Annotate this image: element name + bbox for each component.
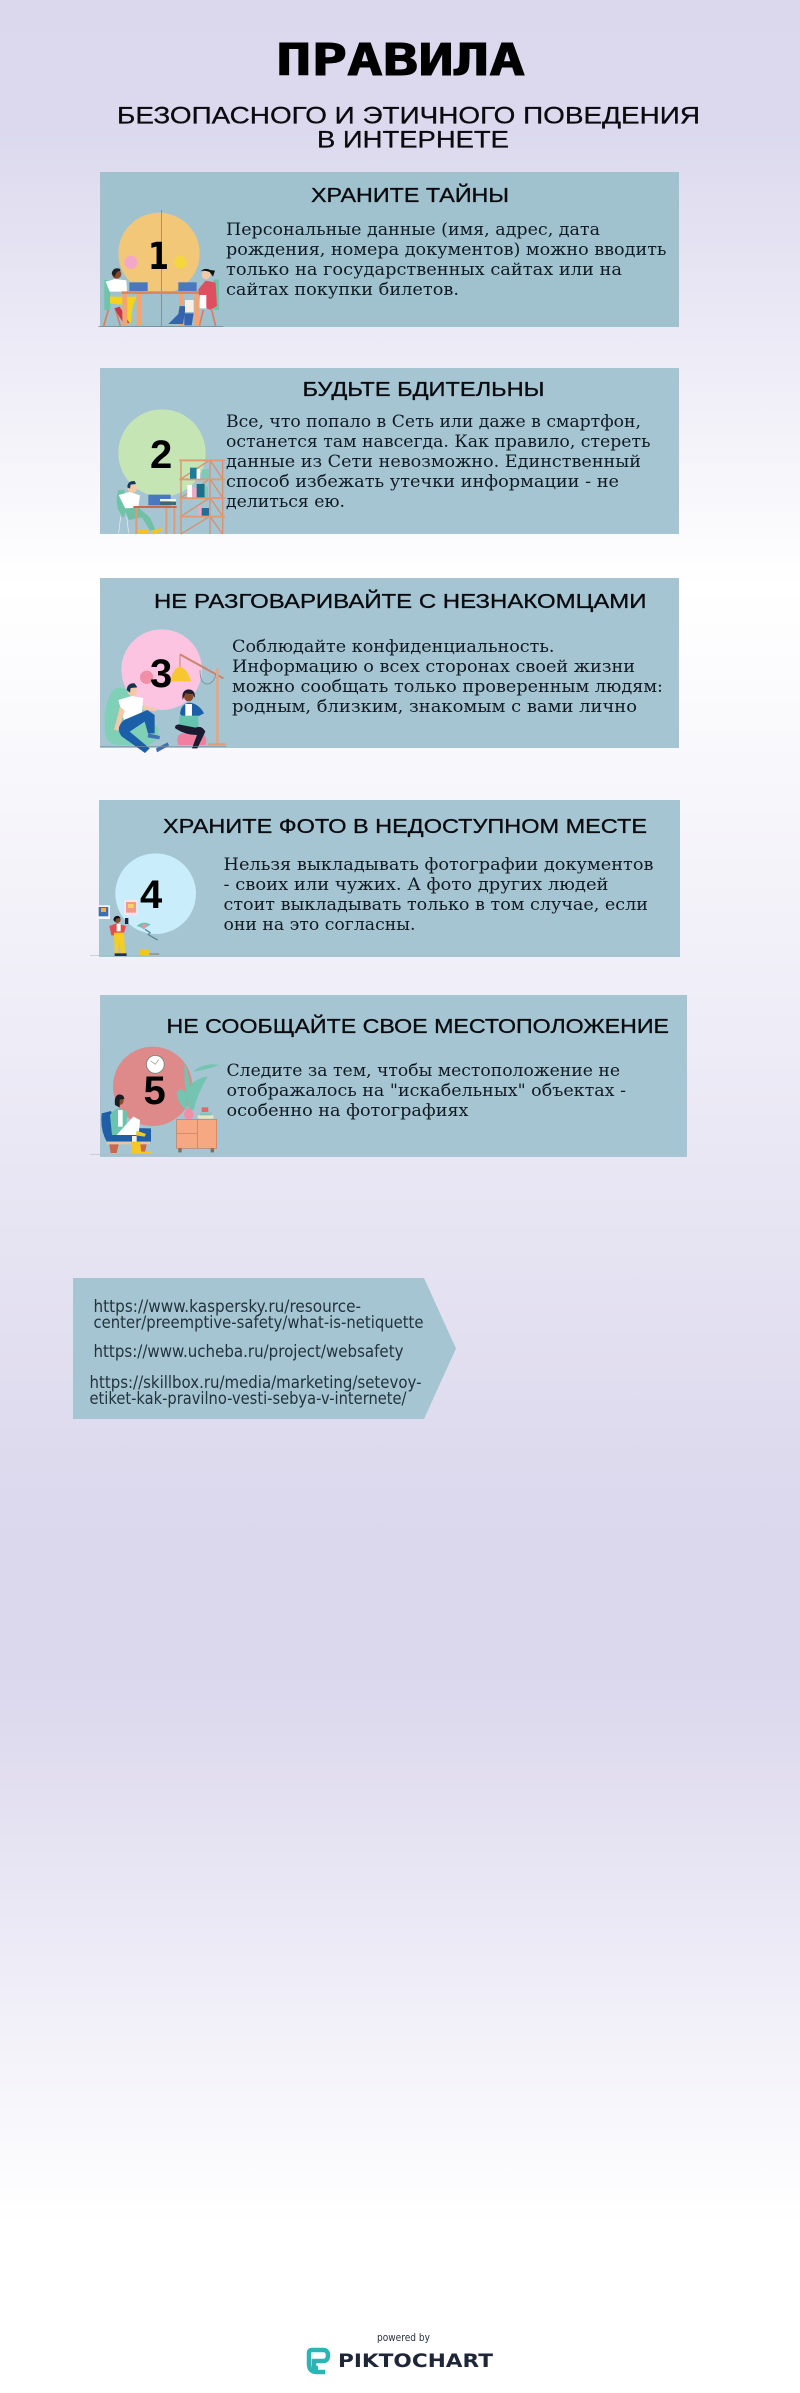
footer: powered by Piktochart: [309, 2331, 493, 2372]
panel 1 background: [100, 172, 679, 327]
panel 3 body text: Соблюдайте конфиденциальность.: [232, 637, 554, 657]
icon: Piktochart logo: [309, 2350, 328, 2372]
panel 4 body text: они на это согласны.: [224, 915, 416, 935]
panel 4 body text: Нельзя выкладывать фотографии документов: [224, 855, 654, 875]
panel 1 body text: только на государственных сайтах или на: [226, 260, 622, 280]
panel 1 body text: [226, 220, 666, 300]
panel 4 background: [99, 800, 680, 957]
powered by text: powered by: [377, 2331, 430, 2344]
Piktochart wordmark: PIKTOCHART: [338, 2350, 493, 2372]
source links: https://skillbox.ru/media/marketing/setevoy-: [90, 1373, 422, 1392]
source links: [90, 1297, 424, 1408]
subtitle: В ИНТЕРНЕТЕ: [317, 126, 509, 154]
panel 2 body text: данные из Сети невозможно. Единственный: [226, 452, 641, 472]
panel 5 background: [100, 995, 687, 1157]
panel 5 number: 5: [144, 1069, 166, 1113]
panel 4 heading: ХРАНИТЕ ФОТО В НЕДОСТУПНОМ МЕСТЕ: [163, 816, 647, 838]
panel 3 background: [100, 578, 679, 748]
source links: etiket-kak-pravilno-vesti-sebya-v-internete/: [90, 1389, 407, 1408]
panel 2 body text: Все, что попало в Сеть или даже в смартфон,: [226, 412, 641, 432]
panel 3 body text: Информацию о всех сторонах своей жизни: [232, 657, 635, 677]
panel 2 heading: БУДЬТЕ БДИТЕЛЬНЫ: [302, 379, 544, 401]
panel 3 body text: [232, 637, 663, 717]
panel 5 body text: [226, 1061, 626, 1121]
panel 2 body text: способ избежать утечки информации - не: [226, 472, 619, 492]
subtitle: [117, 102, 700, 154]
panel 2 body text: делиться ею.: [226, 492, 345, 512]
panel 3 body text: можно сообщать только проверенным людям:: [232, 677, 663, 697]
sources arrow panel: [73, 1278, 456, 1419]
panel 1 body text: сайтах покупки билетов.: [226, 280, 459, 300]
panel 2 background: [100, 368, 679, 534]
arrow shape: [73, 1278, 456, 1419]
panel 4 body text: - своих или чужих. А фото других людей: [224, 875, 608, 895]
panel 5 illustration: woman in armchair with cabinet and plant: [90, 1047, 219, 1154]
panel 1 illustration: two people at a table: [98, 210, 223, 327]
panel 2 body text: [226, 412, 650, 512]
panel 5 body text: особенно на фотографиях: [226, 1101, 469, 1121]
panel 4 number: 4: [140, 873, 163, 917]
source links: center/preemptive-safety/what-is-netiquette: [94, 1313, 424, 1332]
panel 1 body text: рождения, номера документов) можно вводить: [226, 240, 666, 260]
panel 3 heading: НЕ РАЗГОВАРИВАЙТЕ С НЕЗНАКОМЦАМИ: [154, 589, 646, 613]
source links: https://www.kaspersky.ru/resource-: [94, 1297, 361, 1316]
panel 4: keep photos private: [90, 800, 680, 957]
panel 2 body text: останется там навсегда. Как правило, стереть: [226, 432, 650, 452]
panel 1 number: 1: [148, 235, 169, 278]
panel 1: keep secrets: [98, 172, 679, 327]
panel 1 body text: Персональные данные (имя, адрес, дата: [226, 220, 600, 240]
panel 5 heading: НЕ СООБЩАЙТЕ СВОЕ МЕСТОПОЛОЖЕНИЕ: [166, 1014, 669, 1038]
panel 2 illustration: man at desk with shelves: [117, 409, 225, 535]
subtitle: БЕЗОПАСНОГО И ЭТИЧНОГО ПОВЕДЕНИЯ: [117, 102, 700, 130]
panel 4 illustration: woman with phone and photos: [90, 853, 196, 956]
panel 5: do not share location: [90, 995, 687, 1157]
panel 3 illustration: two people talking under a lamp: [100, 629, 227, 753]
title: ПРАВИЛА: [276, 35, 525, 86]
panel 3 body text: родным, близким, знакомым с вами лично: [232, 697, 637, 717]
panel 2 number: 2: [150, 433, 172, 477]
panel 4 body text: [224, 855, 654, 935]
panel 4 body text: стоит выкладывать только в том случае, если: [224, 895, 648, 915]
panel 1 heading: ХРАНИТЕ ТАЙНЫ: [311, 183, 509, 207]
panel 5 body text: отображалось на "искабельных" объектах -: [226, 1081, 626, 1101]
panel 3: do not talk to strangers: [100, 578, 679, 753]
source links: https://www.ucheba.ru/project/websafety: [94, 1342, 404, 1361]
panel 2: be vigilant: [100, 368, 679, 535]
panel 5 body text: Следите за тем, чтобы местоположение не: [226, 1061, 620, 1081]
panel 3 number: 3: [150, 652, 172, 696]
